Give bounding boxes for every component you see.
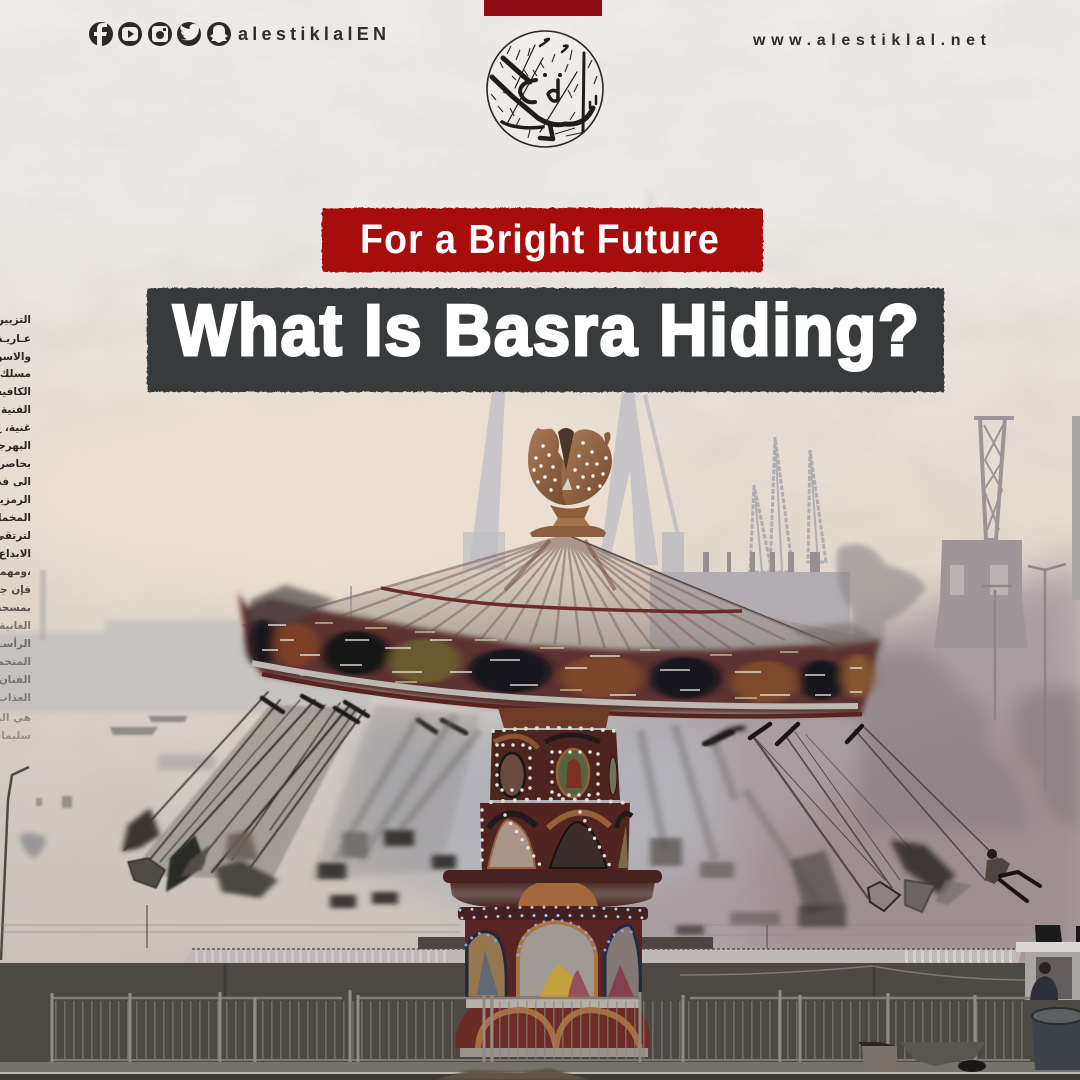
barrel [1032, 1008, 1080, 1070]
kiosk with attendant [1016, 925, 1080, 1000]
subtitle banner: For a Bright Future [360, 217, 719, 262]
logo: calligraphic seal [487, 31, 603, 147]
background port cranes and buildings [350, 190, 1080, 790]
title banner: What Is Basra Hiding? [173, 290, 919, 371]
swings: blurred middle-left group [318, 715, 480, 908]
tower light strings [460, 728, 648, 955]
social icons row [89, 22, 231, 46]
base with arcs [455, 998, 650, 1057]
fence [52, 990, 1030, 1070]
swings: left group [122, 692, 480, 898]
carousel rim with medallions [238, 585, 880, 716]
upper collar [498, 708, 610, 728]
carousel tower [443, 708, 662, 1057]
dark red chord [381, 588, 742, 612]
newspaper text column [0, 314, 31, 742]
website address: www.alestiklal.net [752, 32, 987, 49]
social handle: alestiklalEN [238, 24, 386, 44]
swings: blurred middle-right group [640, 725, 846, 935]
tier two with arches [480, 803, 632, 872]
rider on swing [985, 849, 1040, 901]
newspaper text column: الرأسـ [0, 636, 31, 650]
hazy trees [837, 544, 1080, 830]
subtitle banner [322, 208, 763, 272]
top red bar [484, 0, 602, 16]
wheelbarrow and crate [858, 1042, 986, 1072]
carousel canopy [240, 533, 878, 690]
newspaper text column: مسلك [0, 368, 31, 380]
swings: right group with rider [705, 724, 1040, 912]
shed roof and perimeter wall [0, 937, 1080, 1063]
left harbour: boats, lamp and bird [0, 570, 1030, 960]
carousel finial [528, 428, 612, 537]
bowl [443, 870, 662, 920]
tier one with portraits [490, 730, 620, 800]
ground [0, 1062, 1080, 1080]
tier three with painted arches [465, 920, 642, 1000]
